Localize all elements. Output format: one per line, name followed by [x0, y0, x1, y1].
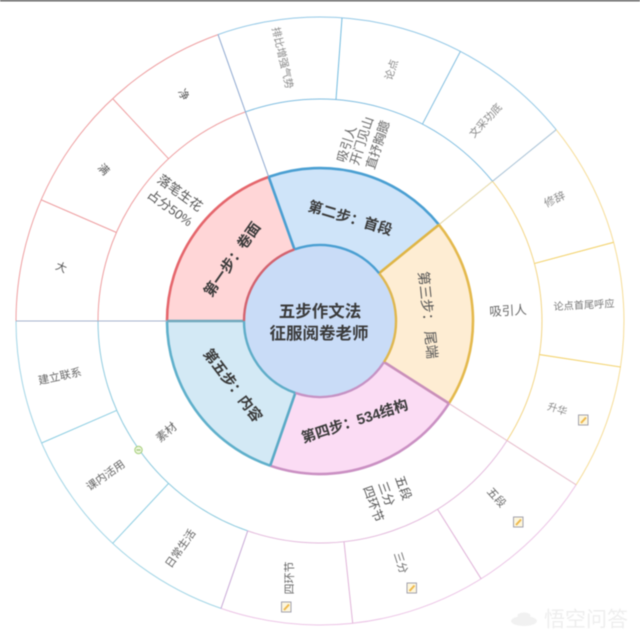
- icon: note on 三分: [407, 583, 416, 593]
- horizontal divider between step 1 and step 5: [16, 320, 244, 322]
- sector: 第四步：534结构: 第四步：534结构: [299, 395, 410, 447]
- sector: 第三步：尾端: [379, 225, 473, 403]
- middle ring text: 五段 三分 四环节: [360, 474, 415, 524]
- outer ring cells: 修辞 论点首尾呼应 升华: 升华: [546, 400, 569, 418]
- branch: step 3 ending: [379, 130, 624, 485]
- outer ring cells: 建立联系 课内活用 日常生活: 建立联系: [37, 365, 83, 387]
- sector: 第一步：卷面: 第一步：卷面: [200, 219, 265, 300]
- outer ring cells: 排比增强气势 论点 文采功底: [218, 17, 556, 181]
- center circle title: [244, 245, 396, 397]
- middle ring text: 吸引人 开门见山 直抒胸臆: 吸引人: [335, 124, 360, 164]
- sector: 第四步：534结构: [270, 362, 449, 474]
- middle ring text: 吸引人 开门见山 直抒胸臆: 开门见山: [347, 115, 376, 167]
- outer ring cells: 修辞 论点首尾呼应 升华: [492, 130, 624, 485]
- outer ring cells: 排比增强气势 论点 文采功底: 文采功底: [467, 101, 505, 140]
- outer ring cells: 大 满 净: 满: [95, 161, 112, 178]
- outer ring cells: 修辞 论点首尾呼应 升华: 修辞: [542, 188, 568, 210]
- watermark: 悟空问答: [544, 608, 628, 632]
- middle ring text: 吸引人: 吸引人: [489, 303, 528, 319]
- outer ring cells: 大 满 净: 大: [54, 258, 69, 276]
- divider line from step 2 to middle ring: [439, 181, 492, 225]
- outer ring cells: 五段 三分 四环节: [221, 403, 576, 625]
- center circle title: 征服阅卷老师: [270, 324, 368, 343]
- middle ring text: 五段 三分 四环节: 三分: [375, 480, 397, 508]
- sector: 第五步：内容: [167, 321, 295, 466]
- sector: 第二步：首段: 第二步：首段: [306, 197, 395, 239]
- branch: step 2 opening paragraph: [218, 17, 556, 273]
- icon: green collapse marker: [135, 446, 142, 454]
- icon: note on 五段: [514, 517, 523, 527]
- outer ring cells: 排比增强气势 论点 文采功底: 论点: [382, 58, 401, 82]
- outer ring cells: 五段 三分 四环节: 四环节: [283, 562, 296, 594]
- middle ring text: 落笔生花 占分50%: [145, 172, 205, 230]
- sector: 第一步：卷面: [167, 177, 294, 321]
- icon: note on 升华: [578, 415, 588, 425]
- outer ring cells: 大 满 净: [16, 35, 245, 321]
- middle ring text: 五段 三分 四环节: 五段: [392, 474, 415, 502]
- sector: 第五步：内容: 第五步：内容: [199, 345, 266, 426]
- middle ring text: 素材: 素材: [153, 419, 180, 445]
- outer ring cells: 修辞 论点首尾呼应 升华: 论点首尾呼应: [553, 297, 615, 313]
- outer ring cells: 五段 三分 四环节: 三分: [391, 550, 410, 575]
- middle ring text: 落笔生花 占分50%: 落笔生花: [155, 172, 205, 214]
- sector: 第三步：尾端: 第三步： 尾端: [415, 270, 441, 360]
- middle ring text: 吸引人 开门见山 直抒胸臆: [335, 115, 393, 171]
- center circle title: 五步作文法: [279, 301, 361, 321]
- outer ring cells: 建立联系 课内活用 日常生活: 日常生活: [162, 526, 199, 570]
- middle ring text: 落笔生花 占分50%: 占分50%: [145, 187, 196, 230]
- outer ring cells: 建立联系 课内活用 日常生活: [16, 321, 248, 608]
- outer ring cells: 排比增强气势 论点 文采功底: 排比增强气势: [269, 26, 296, 91]
- middle ring text: 吸引人 开门见山 直抒胸臆: 直抒胸臆: [363, 118, 393, 171]
- sector: 第二步：首段: [246, 112, 439, 273]
- outer ring cells: 五段 三分 四环节: 五段: [484, 484, 509, 510]
- branch: step 5 content: [16, 321, 295, 608]
- middle ring text: 五段 三分 四环节: 四环节: [360, 484, 386, 524]
- branch: step 4 534 structure: [221, 362, 576, 625]
- icon: note on 四环节: [282, 602, 291, 612]
- outer ring cells: 大 满 净: 净: [175, 86, 193, 103]
- outer ring cells: 建立联系 课内活用 日常生活: 课内活用: [83, 457, 127, 494]
- branch: step 1 paper appearance: [16, 35, 294, 321]
